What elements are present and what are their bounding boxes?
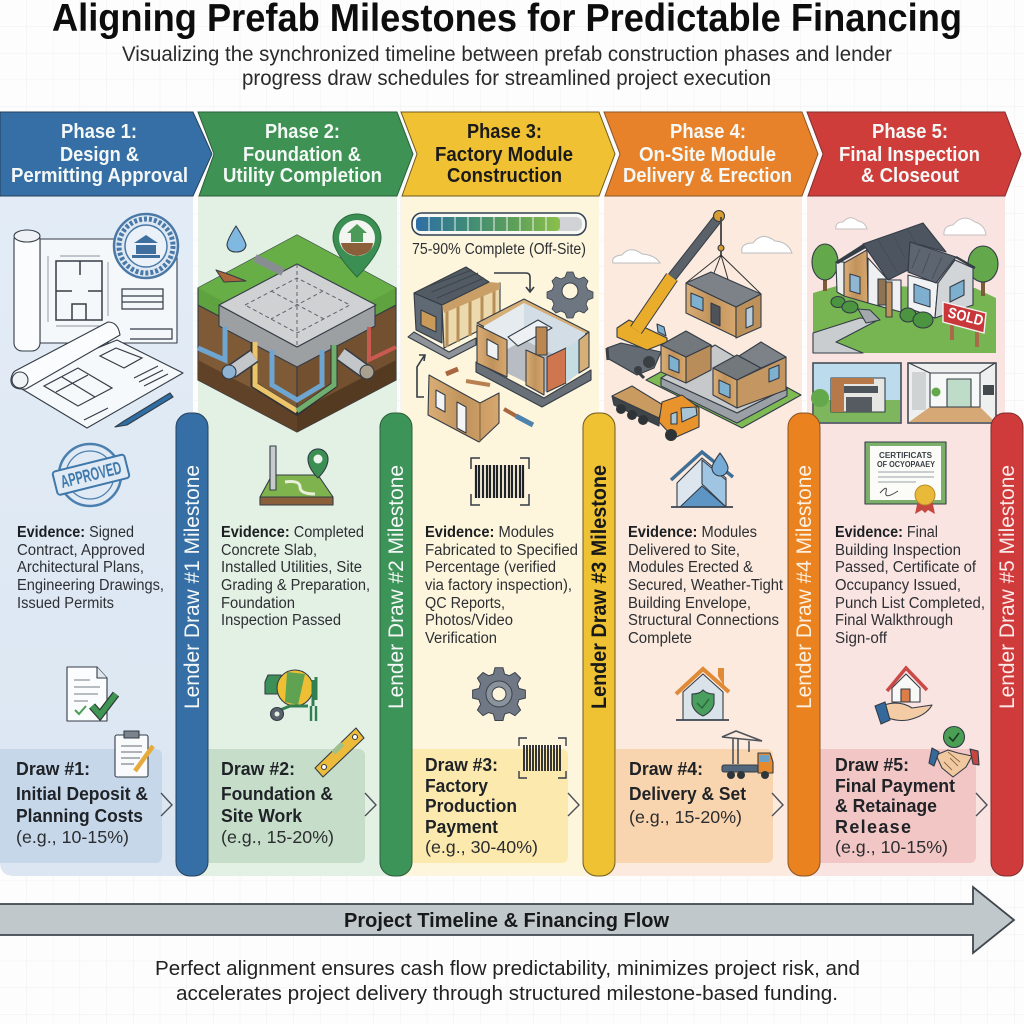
text block: evidence phase 4: Complete: [628, 630, 692, 647]
panel: draw 5: [820, 726, 979, 863]
text block: evidence phase 4: [628, 524, 784, 647]
panel: draw 4: (e.g., 15-20%): [629, 807, 742, 827]
heading: phase 1 chevron: Phase 1:: [61, 121, 137, 143]
heading: phase 3 chevron: [401, 112, 615, 196]
text block: evidence phase 5: [835, 524, 985, 647]
text block: evidence phase 3: [425, 524, 578, 647]
icon: signed document with check: [67, 667, 116, 721]
icon: settings gear: [473, 668, 525, 720]
heading: phase 3 chevron: Construction: [447, 165, 562, 187]
heading: phase 3 chevron: Phase 3:: [467, 121, 542, 143]
text block: evidence phase 5: Occupancy Issued,: [835, 577, 961, 594]
illustration: progress bar 75-90 percent: [412, 213, 586, 258]
heading: phase 2 chevron: Foundation &: [243, 144, 361, 166]
panel: draw 2: Foundation &: [221, 784, 333, 804]
icon: house with shield: [676, 668, 729, 720]
illustration: crane setting modules: [607, 210, 801, 441]
text block: evidence phase 1: Contract, Approved: [17, 542, 145, 559]
heading: phase 5 chevron: & Closeout: [861, 165, 959, 187]
panel: draw 3: Draw #3:: [425, 755, 498, 775]
illustration: finished house sold: [812, 218, 998, 353]
heading: phase 2 chevron: [198, 112, 413, 196]
icon: approved stamp: APPROVED: [58, 458, 123, 492]
icon: certificate of occupancy: [865, 442, 946, 514]
heading: phase 1 chevron: [0, 112, 212, 196]
panel: phase backgrounds: [0, 196, 1005, 876]
panel: draw 4: [616, 731, 773, 863]
milestone bar 5: [991, 413, 1023, 876]
heading: phase 4 chevron: [604, 112, 818, 196]
icon: crane truck: [722, 731, 773, 779]
panel: draw 3: Production: [425, 796, 517, 816]
panel: draw 2: Draw #2:: [221, 759, 295, 779]
panel: draw 3: Factory: [425, 776, 488, 796]
heading: phase 4 chevron: Phase 4:: [670, 121, 746, 143]
text block: evidence phase 3: Verification: [425, 630, 497, 647]
text block: evidence phase 5: Building Inspection: [835, 542, 961, 559]
icon: certificate of occupancy: OF OCYOPAAEY: [877, 460, 936, 469]
footer text: Perfect alignment ensures cash flow predictability, minimizes project risk, and: [155, 958, 860, 980]
text block: evidence phase 2: Concrete Slab,: [221, 542, 317, 559]
panel: draw 5: Draw #5:: [835, 755, 909, 775]
text block: evidence phase 1: [17, 524, 164, 612]
icon: barcode scan: [471, 458, 529, 505]
panel: draw 4: Draw #4:: [629, 759, 703, 779]
panel: draw 3: [412, 738, 568, 863]
text block: evidence phase 5: Evidence: Final: [835, 524, 938, 541]
heading: phase 2 chevron: Utility Completion: [223, 165, 382, 187]
illustration: finished house sold: SOLD: [946, 304, 985, 330]
heading: phase 3 chevron: Factory Module: [435, 144, 573, 166]
panel: draw 3: Payment: [425, 817, 498, 837]
text block: evidence phase 1: Engineering Drawings,: [17, 577, 164, 594]
arrow: project timeline: [0, 887, 1014, 953]
milestone bar 4: Lender Draw #4 Milestone: [793, 465, 816, 709]
text block: evidence phase 4: Structural Connections: [628, 612, 779, 629]
milestone bar 5: Lender Draw #5 Milestone: [996, 465, 1019, 709]
milestone bar 3: Lender Draw #3 Milestone: [588, 465, 611, 709]
illustration: progress bar 75-90 percent: 75-90% Complete (Off-Site): [412, 241, 586, 258]
panel: draw 1: (e.g., 10-15%): [16, 827, 129, 847]
heading: phase 5 chevron: Final Inspection: [839, 144, 980, 166]
panel: draw 5: (e.g., 10-15%): [835, 837, 948, 857]
text block: evidence phase 4: Modules Erected &: [628, 559, 754, 576]
text block: evidence phase 3: Photos/Video: [425, 612, 513, 629]
heading: phase 4 chevron: On-Site Module: [639, 144, 776, 166]
subtitle: [122, 43, 892, 90]
icon: clipboard and pencil: [115, 731, 153, 777]
subtitle: Visualizing the synchronized timeline between prefab construction phases and lender: [122, 43, 892, 66]
milestone bar 4: [788, 413, 820, 876]
icon: weather-tight building: [671, 452, 733, 507]
panel: draw 1: Planning Costs: [16, 806, 143, 826]
icon: small barcode: [519, 738, 566, 778]
footer text: [155, 958, 860, 1005]
text block: evidence phase 3: Percentage (verified: [425, 559, 556, 576]
heading: phase 4 chevron: Delivery & Erection: [623, 165, 792, 187]
milestone bar 3: [583, 413, 615, 876]
illustration: interior thumbnail: [908, 363, 996, 423]
text block: evidence phase 1: Evidence: Signed: [17, 524, 134, 541]
panel: draw 2: Site Work: [221, 806, 303, 826]
text block: evidence phase 2: Inspection Passed: [221, 612, 341, 629]
heading: phase 2 chevron: Phase 2:: [265, 121, 340, 143]
text block: evidence phase 2: Installed Utilities, Site: [221, 559, 362, 576]
icon: spirit level: [315, 728, 364, 777]
text block: evidence phase 2: Grading & Preparation,: [221, 577, 370, 594]
text block: evidence phase 2: Evidence: Completed: [221, 524, 364, 541]
text block: evidence phase 2: [221, 524, 370, 629]
milestone bar 1: Lender Draw #1 Milestone: [181, 465, 204, 709]
panel: draw 2: [208, 728, 365, 863]
subtitle: progress draw schedules for streamlined project execution: [242, 67, 771, 90]
panel: draw 5: Final Payment: [835, 776, 955, 796]
panel: draw 1: Initial Deposit &: [16, 784, 148, 804]
arrow: project timeline: Project Timeline & Financing Flow: [344, 910, 669, 932]
text block: evidence phase 2: Foundation: [221, 595, 295, 612]
heading: phase 1 chevron: Permitting Approval: [11, 165, 188, 187]
milestone bar 1: [176, 413, 208, 876]
illustration: exterior thumbnail: [811, 363, 901, 423]
footer text: accelerates project delivery through structured milestone-based funding.: [176, 983, 838, 1005]
text block: evidence phase 5: Punch List Completed,: [835, 595, 985, 612]
illustration: factory modules: [408, 267, 593, 442]
text block: evidence phase 4: Secured, Weather-Tight: [628, 577, 784, 594]
icon: approved stamp: [52, 444, 130, 506]
panel: draw 1: Draw #1:: [16, 759, 90, 779]
text block: evidence phase 4: Delivered to Site,: [628, 542, 740, 559]
text block: evidence phase 3: via factory inspection),: [425, 577, 572, 594]
heading: phase 1 chevron: Design &: [60, 144, 139, 166]
icon: graded site with pin: [260, 446, 333, 505]
text block: evidence phase 3: Fabricated to Specified: [425, 542, 578, 559]
icon: cement mixer: [265, 670, 316, 721]
text block: evidence phase 5: Final Walkthrough: [835, 612, 953, 629]
text block: evidence phase 5: Sign-off: [835, 630, 888, 647]
text block: evidence phase 3: QC Reports,: [425, 595, 505, 612]
milestone bar 2: Lender Draw #2 Milestone: [385, 465, 408, 709]
arrows: draw chevrons to milestone bars: [161, 793, 987, 816]
text block: evidence phase 4: Building Envelope,: [628, 595, 751, 612]
heading: phase 5 chevron: Phase 5:: [872, 121, 948, 143]
text block: evidence phase 3: Evidence: Modules: [425, 524, 554, 541]
panel: draw 4: Delivery & Set: [629, 784, 746, 804]
panel: draw 5: Release: [835, 817, 911, 837]
text block: evidence phase 1: Architectural Plans,: [17, 559, 144, 576]
panel: draw 3: (e.g., 30-40%): [425, 837, 538, 857]
icon: house in hand: [875, 668, 932, 724]
heading: phase 5 chevron: [807, 112, 1021, 196]
text block: evidence phase 4: Evidence: Modules: [628, 524, 757, 541]
text block: evidence phase 1: Issued Permits: [17, 595, 114, 612]
panel: draw 2: (e.g., 15-20%): [221, 827, 334, 847]
illustration: blueprints and permit stamp: [11, 214, 183, 428]
icon: certificate of occupancy: CERTIFICATS: [879, 451, 933, 460]
panel: draw 1: [0, 731, 162, 863]
icon: handshake with check: [929, 726, 979, 777]
text block: evidence phase 5: Passed, Certificate of: [835, 559, 977, 576]
milestone bar 2: [380, 413, 412, 876]
illustration: foundation and utilities cutaway: [198, 214, 396, 432]
panel: draw 5: & Retainage: [835, 796, 937, 816]
